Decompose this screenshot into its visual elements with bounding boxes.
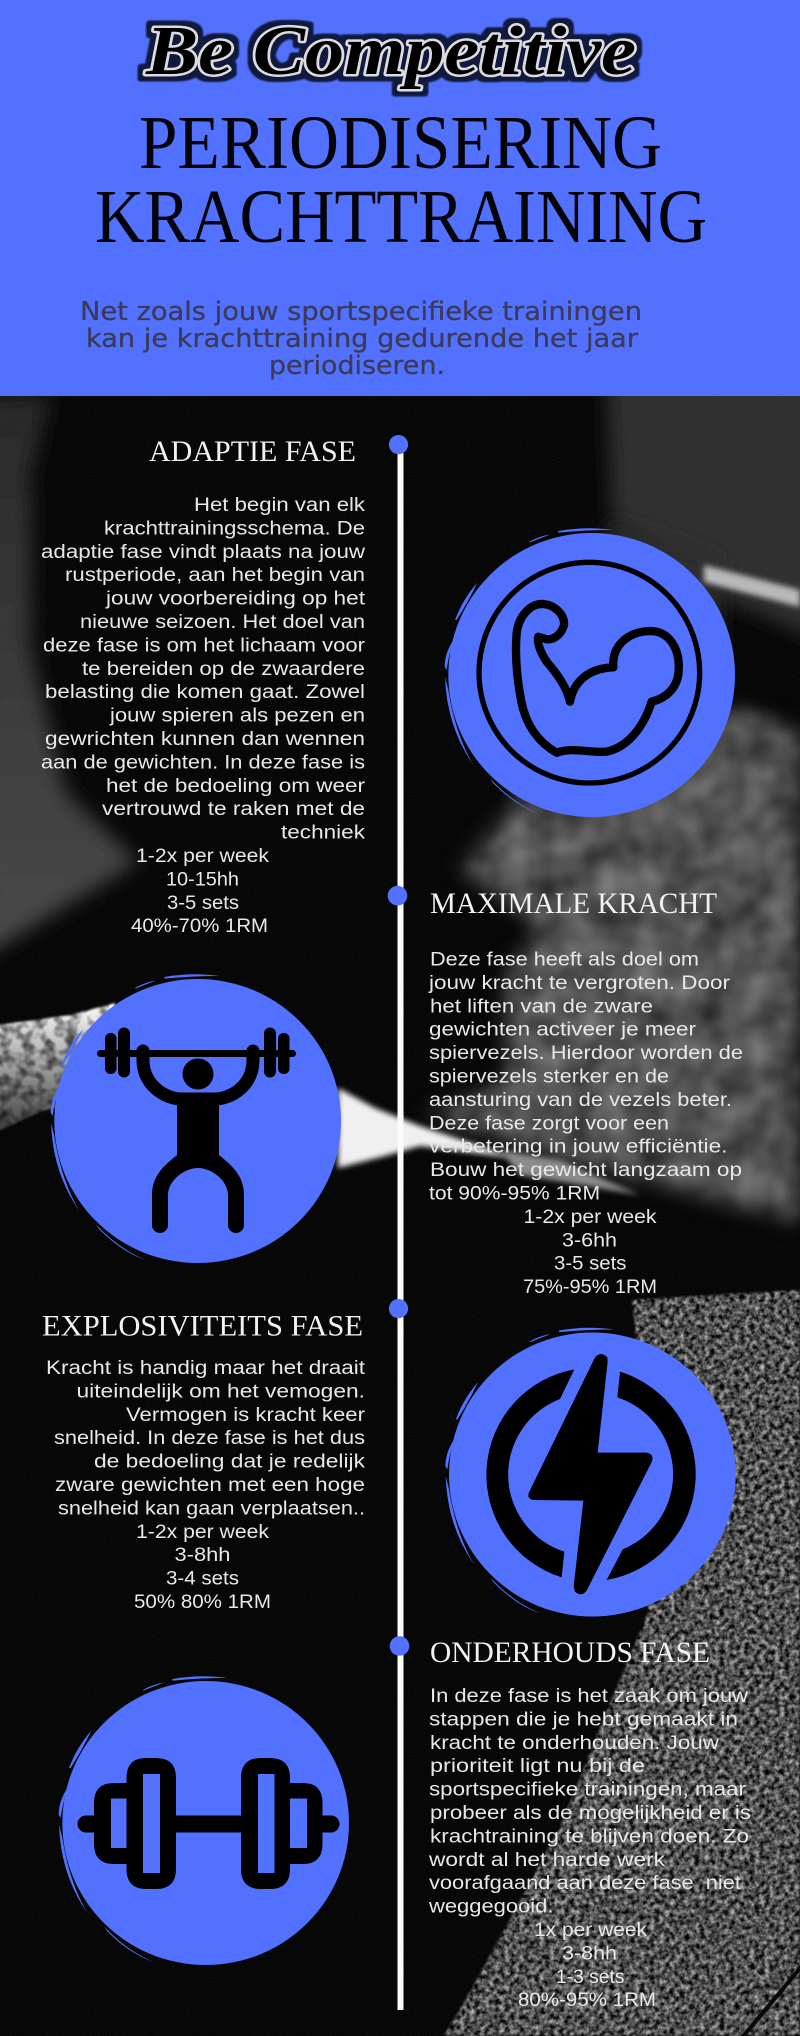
text: explosiviteits fase description and stats: snelheid. In deze fase is het dus (54, 1428, 365, 1449)
text: adaptie fase description and stats: het de bedoeling om weer (106, 776, 366, 797)
text: explosiviteits fase description and stats: 3-4 sets (166, 1569, 239, 1590)
text: adaptie fase description and stats: nieuwe seizoen. Het doel van (80, 612, 365, 633)
text: onderhouds fase description and stats: 1x per week (534, 1920, 648, 1941)
text: adaptie fase description and stats: rustperiode, aan het begin van (65, 565, 365, 586)
text: maximale kracht description and stats (428, 950, 743, 1298)
text: adaptie fase description and stats: belasting die komen gaat. Zowel (45, 682, 365, 703)
heading: maximale kracht: MAXIMALE KRACHT (430, 887, 717, 920)
text: onderhouds fase description and stats: stappen die je hebt gemaakt in (429, 1709, 738, 1730)
panel: maximale kracht (428, 887, 743, 1298)
text: adaptie fase description and stats: techniek (281, 823, 366, 844)
text: maximale kracht description and stats: jouw kracht te vergroten. Door (428, 973, 731, 994)
text: maximale kracht description and stats: spiervezels. Hierdoor worden de (429, 1043, 743, 1064)
text: maximale kracht description and stats: het liften van de zware (430, 996, 653, 1017)
text: onderhouds fase description and stats (428, 1686, 751, 2011)
panel: explosiviteits fase (42, 1310, 366, 1613)
text: explosiviteits fase description and stats: snelheid kan gaan verplaatsen.. (58, 1498, 365, 1519)
heading: explosiviteits fase: EXPLOSIVITEITS FASE (42, 1310, 363, 1343)
icon: flexed bicep in circle (445, 528, 735, 817)
text: adaptie fase description and stats: Het begin van elk (194, 495, 366, 516)
text: adaptie fase description and stats: gewrichten kunnen dan wennen (45, 729, 365, 750)
title: KRACHTTRAINING (95, 175, 707, 259)
text: onderhouds fase description and stats: sportspecifieke trainingen, maar (429, 1780, 747, 1801)
text: maximale kracht description and stats: tot 90%-95% 1RM (429, 1184, 600, 1204)
text: explosiviteits fase description and stats: Vermogen is kracht keer (126, 1405, 366, 1426)
text: explosiviteits fase description and stats: 3-8hh (174, 1545, 230, 1566)
icon: dumbbell in circle (59, 1676, 349, 1965)
logo: Be Competitive: Be Competitive (145, 13, 636, 90)
text: adaptie fase description and stats: te bereiden op de zwaardere (82, 659, 365, 680)
text: explosiviteits fase description and stats: uiteindelijk om het vemogen. (76, 1381, 365, 1402)
intro text (80, 297, 642, 381)
text: adaptie fase description and stats (41, 495, 366, 937)
text: maximale kracht description and stats: gewichten activeer je meer (429, 1020, 697, 1041)
title (95, 101, 707, 259)
panel: adaptie fase (41, 435, 366, 937)
title: PERIODISERING (139, 101, 662, 185)
text: adaptie fase description and stats: krachttrainingsschema. De (104, 518, 365, 539)
text: maximale kracht description and stats: 3-5 sets (554, 1254, 626, 1275)
text: adaptie fase description and stats: 1-2x per week (136, 846, 270, 867)
text: adaptie fase description and stats: 10-15hh (166, 869, 239, 890)
intro text: periodiseren. (269, 351, 445, 381)
text: maximale kracht description and stats: 75%-95% 1RM (523, 1277, 657, 1298)
text: onderhouds fase description and stats: In deze fase is het zaak om jouw (430, 1686, 748, 1707)
text: onderhouds fase description and stats: weggegooid. (428, 1897, 554, 1918)
text: onderhouds fase description and stats: voorafgaand aan deze fase niet (429, 1873, 742, 1894)
timeline (388, 435, 409, 2010)
heading: adaptie fase: ADAPTIE FASE (149, 435, 356, 468)
text: maximale kracht description and stats: Deze fase heeft als doel om (430, 950, 699, 970)
text: adaptie fase description and stats: aan de gewichten. In deze fase is (41, 752, 365, 773)
text: onderhouds fase description and stats: 1-3 sets (556, 1967, 624, 1988)
text: adaptie fase description and stats: adaptie fase vindt plaats na jouw (41, 542, 365, 563)
text: adaptie fase description and stats: jouw spieren als pezen en (109, 706, 365, 727)
text: maximale kracht description and stats: Bouw het gewicht langzaam op (430, 1160, 742, 1181)
text: explosiviteits fase description and stats: 1-2x per week (136, 1522, 270, 1543)
text: maximale kracht description and stats: Deze fase zorgt voor een (429, 1113, 669, 1134)
text: onderhouds fase description and stats: 3-8hh (562, 1943, 617, 1964)
text: adaptie fase description and stats: vertrouwd te raken met de (102, 799, 365, 820)
text: explosiviteits fase description and stats: de bedoeling dat je redelijk (94, 1452, 366, 1473)
header band (0, 0, 800, 396)
text: explosiviteits fase description and stats (46, 1358, 366, 1613)
text: maximale kracht description and stats: aansturing van de vezels beter. (429, 1090, 732, 1111)
text: maximale kracht description and stats: 3-6hh (562, 1230, 617, 1251)
text: onderhouds fase description and stats: krachtraining te blijven doen. Zo (430, 1826, 749, 1847)
text: onderhouds fase description and stats: probeer als de mogelijkheid er is (430, 1803, 751, 1824)
text: adaptie fase description and stats: 40%-70% 1RM (131, 916, 268, 937)
intro text: Net zoals jouw sportspecifieke trainingen (80, 297, 642, 327)
text: maximale kracht description and stats: 1-2x per week (524, 1207, 657, 1228)
text: maximale kracht description and stats: spiervezels sterker en de (429, 1066, 669, 1088)
text: onderhouds fase description and stats: 80%-95% 1RM (518, 1990, 656, 2011)
text: explosiviteits fase description and stats: Kracht is handig maar het draait (46, 1358, 366, 1379)
text: onderhouds fase description and stats: prioriteit ligt nu bij de (430, 1756, 645, 1777)
heading: onderhouds fase: ONDERHOUDS FASE (430, 1636, 710, 1669)
text: explosiviteits fase description and stats: zware gewichten met een hoge (55, 1475, 365, 1496)
icon: weightlifter in circle (51, 974, 341, 1263)
panel: onderhouds fase (428, 1636, 751, 2011)
text: onderhouds fase description and stats: wordt al het harde werk (428, 1850, 666, 1871)
intro text: kan je krachttraining gedurende het jaar (86, 324, 639, 354)
icon: lightning bolt in circle (445, 1328, 736, 1616)
text: maximale kracht description and stats: verbetering in jouw efficiëntie. (429, 1137, 728, 1158)
text: adaptie fase description and stats: jouw voorbereiding op het (105, 589, 366, 610)
text: adaptie fase description and stats: 3-5 sets (167, 893, 239, 914)
text: adaptie fase description and stats: deze fase is om het lichaam voor (43, 635, 366, 656)
text: onderhouds fase description and stats: kracht te onderhouden. Jouw (430, 1733, 719, 1754)
text: explosiviteits fase description and stats: 50% 80% 1RM (134, 1592, 271, 1613)
